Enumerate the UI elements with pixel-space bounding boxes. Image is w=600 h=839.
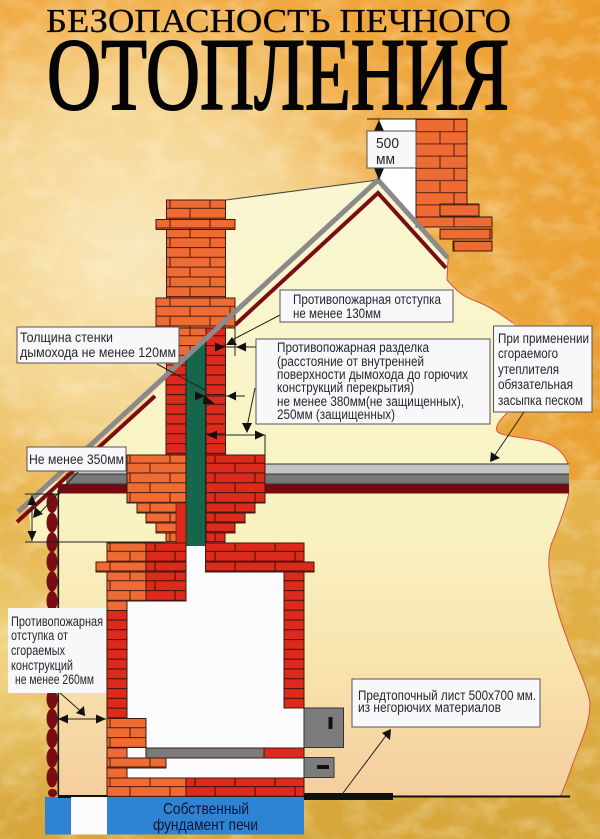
callout: chimney wall thickness: Толщина стенки — [20, 330, 113, 345]
ridge chimney white gap — [379, 119, 416, 227]
ceiling fire break — [127, 455, 265, 543]
title: БЕЗОПАСНОСТЬ ПЕЧНОГО — [46, 3, 511, 40]
callout: insulation sand: утеплителя — [498, 362, 559, 377]
callout: chimney wall thickness: дымохода не менее 120мм — [20, 345, 176, 360]
log wall — [46, 490, 59, 797]
house interior — [28, 180, 590, 797]
callout: fire break spacing: Противопожарная разделка — [277, 340, 429, 355]
callout: insulation sand: сгораемого — [498, 346, 558, 361]
callout: insulation sand — [490, 326, 592, 462]
callout: pre-furnace sheet — [343, 679, 540, 793]
floor and pre-furnace sheet — [58, 793, 570, 800]
callout: fire break spacing: 250мм (защищенных) — [277, 407, 395, 422]
callout: setback from combustible structures: сгораемых — [11, 643, 65, 658]
callout: pre-furnace sheet: Предтопочный лист 500х700 мм. — [358, 688, 536, 703]
callout: chimney top clearance 500 mm: мм — [376, 152, 395, 168]
callout: fire break spacing: поверхности дымохода до горючих — [277, 367, 468, 382]
firebox interior — [127, 546, 304, 778]
callout: roof clearance 350 mm — [25, 447, 165, 542]
flue — [186, 339, 206, 546]
main chimney — [156, 200, 235, 465]
callout: fire break spacing: не менее 380мм(не защищенных), — [277, 394, 464, 409]
callout: insulation sand: обязательная — [498, 377, 573, 392]
foundation: фундамент печи — [153, 817, 258, 834]
furnace door — [304, 708, 344, 748]
callout: insulation sand: засыпка песком — [498, 393, 583, 408]
callout: fire break spacing: конструкций перекрытия) — [277, 380, 414, 395]
callout: setback from combustible structures: не менее 260мм — [15, 672, 94, 687]
callout: setback from combustible structures — [8, 608, 106, 724]
ridge chimney — [416, 119, 492, 251]
roof covering — [18, 180, 448, 512]
callout: setback from combustible structures: отступка от — [11, 628, 68, 643]
callout: chimney top clearance 500 mm — [367, 119, 416, 180]
foundation: Собственный — [163, 801, 249, 818]
red roof lining — [17, 193, 446, 522]
ceiling layers — [58, 464, 569, 494]
callout: chimney wall thickness — [17, 327, 245, 404]
stove — [96, 543, 314, 797]
callout: pre-furnace sheet: из негорючих материалов — [358, 700, 501, 715]
callout: fire setback 130 mm: Противопожарная отступка — [293, 292, 441, 307]
callout: setback from combustible structures: Противопожарная — [11, 614, 103, 629]
callout: fire setback 130 mm: не менее 130мм — [293, 306, 381, 321]
foundation — [45, 797, 304, 834]
callout: fire setback 130 mm — [226, 290, 453, 356]
callout: roof clearance 350 mm: Не менее 350мм — [29, 452, 124, 467]
callout: fire break spacing — [207, 339, 490, 455]
callout: setback from combustible structures: конструкций — [11, 658, 73, 673]
callout: fire break spacing: (расстояние от внутренней — [277, 354, 424, 369]
callout: chimney top clearance 500 mm: 500 — [376, 136, 399, 152]
ash door — [304, 758, 334, 778]
